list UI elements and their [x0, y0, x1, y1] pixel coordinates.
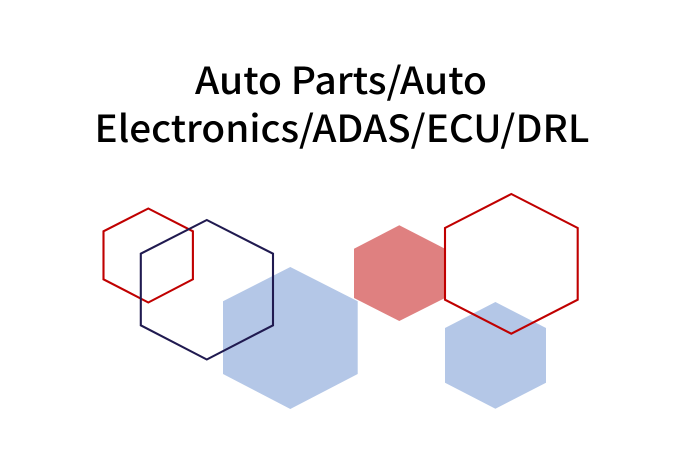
title — [94, 51, 590, 153]
title: Auto Parts/Auto — [195, 51, 487, 105]
hexagon: filled pink — [354, 225, 445, 321]
hexagon: small filled blue, right — [445, 302, 546, 409]
hexagon: large red outline — [445, 194, 578, 334]
hexagon: navy outline — [141, 220, 273, 360]
hexagon: large filled blue, left — [223, 267, 358, 409]
title: Electronics/ADAS/ECU/DRL — [94, 99, 590, 153]
hexagon: small red outline — [104, 208, 193, 302]
